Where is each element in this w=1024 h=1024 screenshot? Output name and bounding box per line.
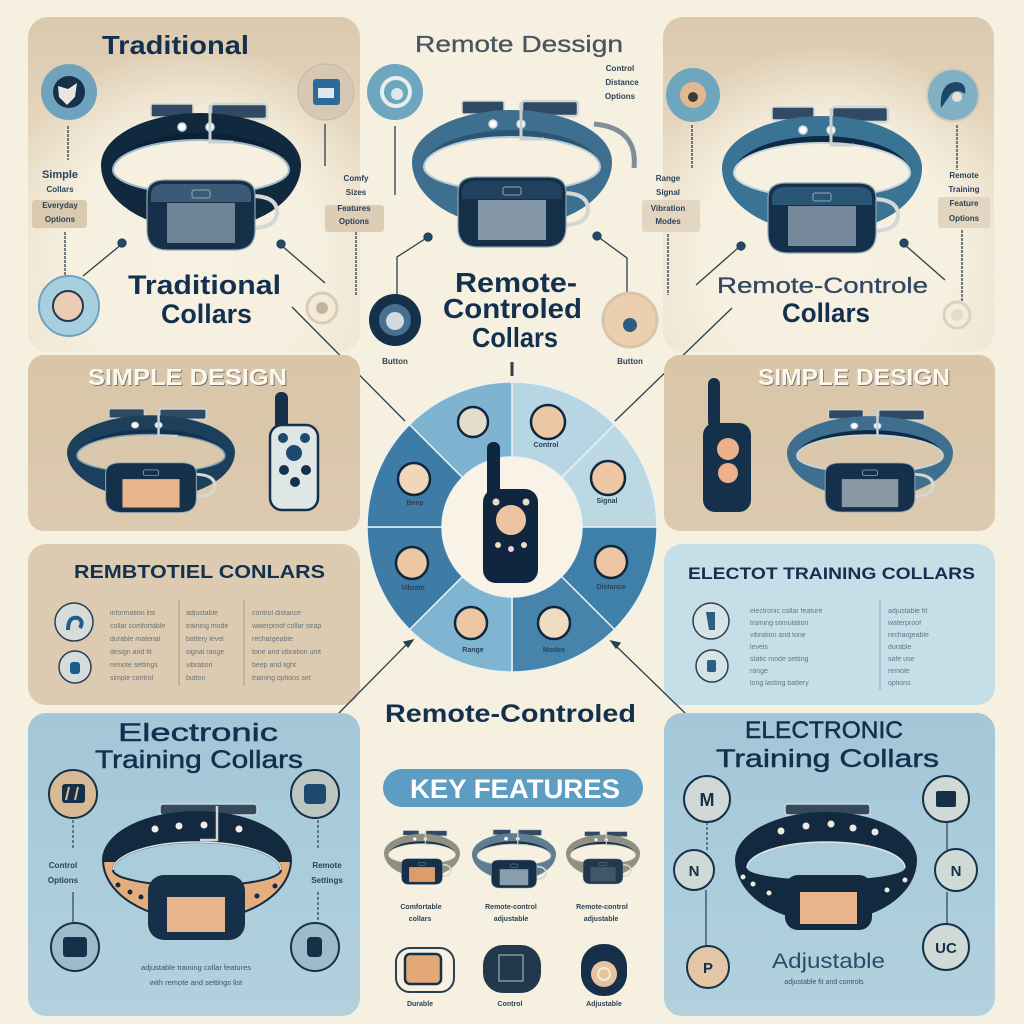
- icon: bottom right: [291, 923, 339, 971]
- icon: mid left: [674, 850, 714, 890]
- collar: navy electronic: [735, 804, 917, 930]
- icon: top left: [49, 770, 97, 818]
- segment labels: [401, 442, 626, 654]
- segment labels: Distance: [596, 584, 626, 591]
- segment labels: Vibrate: [401, 585, 425, 592]
- text: left callout: Modes: [655, 217, 681, 226]
- icon: bottom left: P: [703, 960, 713, 977]
- collar: feature 1: [384, 830, 460, 884]
- text: left callout: Options: [48, 876, 79, 885]
- text: feature labels row two: Durable: [407, 1001, 433, 1008]
- panel: electronic training collars right: [664, 713, 995, 1016]
- text: table rows: range: [750, 668, 768, 675]
- text: feature labels row one: Remote-control: [485, 904, 537, 911]
- heading: remote controlled collars: Remote-Controle: [717, 273, 928, 298]
- donut chart: remote buttons: [367, 382, 657, 672]
- text: table rows: static mode setting: [750, 656, 808, 663]
- icon: peach badge: Button: [617, 357, 643, 366]
- connector lines: [395, 126, 627, 376]
- collar: peach electronic: [103, 804, 291, 940]
- text: left callout: Signal: [656, 188, 680, 197]
- text: feature labels row two: [407, 1001, 622, 1008]
- text: table rows: options: [888, 680, 911, 687]
- text: table rows: battery level: [186, 636, 224, 643]
- text: common features callout: Sizes: [346, 188, 367, 197]
- collar: feature 2: [472, 830, 556, 888]
- icon: mid left: N: [689, 863, 699, 880]
- heading: remote controlled collars: Remote-: [455, 267, 577, 298]
- icon: top right badge: [298, 64, 354, 120]
- icon: feature 4: [396, 948, 454, 992]
- text: right callout: Remote: [949, 171, 979, 180]
- text: table rows: control distance: [252, 610, 301, 617]
- heading: [95, 719, 303, 774]
- segments: [367, 382, 657, 672]
- segment labels: Beep: [406, 500, 424, 507]
- text: remote note: Distance: [605, 78, 639, 87]
- panel: traditional collars: [28, 17, 405, 421]
- icon: remote badge: [367, 64, 423, 120]
- text: right callout: [311, 861, 343, 885]
- icon: bottom left: [51, 923, 99, 971]
- text: table rows: beep and light: [252, 662, 296, 669]
- text: table rows: rechargeable: [888, 632, 929, 639]
- text: table rows: levels: [750, 644, 768, 651]
- text: left callout: [48, 861, 79, 885]
- text: simple design callout: [32, 169, 87, 228]
- heading: Electronic: [118, 719, 278, 747]
- icon: lower left badge: [39, 276, 99, 336]
- icon: peach badge: [603, 293, 657, 366]
- text: right callout: [938, 171, 990, 228]
- panel: simple design left: [28, 355, 360, 531]
- text: right callout: Options: [949, 214, 980, 223]
- text: table rows: design and fit: [110, 649, 152, 656]
- connector lines: [73, 820, 318, 922]
- text: feature labels row one: [400, 904, 628, 923]
- text: left callout: Control: [49, 861, 77, 870]
- heading: remote controlled collars: [717, 273, 928, 328]
- icon: top left: M: [700, 790, 714, 810]
- icon: dark remote: [703, 378, 751, 512]
- heading: SIMPLE DESIGN: [759, 365, 951, 391]
- text: table rows: [750, 600, 929, 690]
- text: table rows: signal range: [186, 649, 224, 656]
- icon: bottom: [696, 650, 728, 682]
- text: table rows: waterproof: [887, 620, 921, 627]
- icon: bottom right: [923, 924, 969, 970]
- text: table rows: safe use: [888, 656, 915, 663]
- text: common features callout: Options: [339, 217, 370, 226]
- panel: remote collars table: [28, 544, 360, 705]
- heading: SIMPLE DESIGN: [89, 365, 288, 391]
- text: table rows: collar comfortable: [110, 623, 165, 630]
- icon: bottom left: [687, 946, 729, 988]
- connector lines: [615, 125, 962, 421]
- heading: traditional collars: [128, 270, 281, 329]
- feature grid: [384, 830, 640, 1008]
- collar: [67, 409, 235, 512]
- connector lines: [706, 822, 947, 946]
- collar: remote controlled: [412, 101, 612, 247]
- text: feature labels row one: adjustable: [494, 916, 528, 923]
- text: table rows: waterproof collar strap: [251, 623, 321, 630]
- text: feature labels row one: adjustable: [584, 916, 618, 923]
- heading: REMBTOTIEL CONLARS: [74, 562, 325, 582]
- text: table rows: remote: [888, 668, 910, 675]
- icon: lower right badge: [307, 293, 337, 323]
- text: common features callout: [325, 174, 384, 232]
- icon: feature 5: [483, 945, 541, 993]
- icon: top left: [684, 776, 730, 822]
- text: remote note: Control: [606, 64, 634, 73]
- panel: electronic training collars left: [28, 713, 360, 1016]
- text: common features callout: Features: [337, 204, 371, 213]
- text: feature labels row one: Comfortable: [400, 904, 442, 911]
- text: simple design callout: Simple: [42, 169, 78, 181]
- heading: remote controlled collars: Collars: [472, 322, 558, 353]
- text: left callout: Vibration: [651, 204, 685, 213]
- heading: remote design: Remote Dessign: [415, 31, 623, 57]
- text: right callout: Settings: [311, 876, 343, 885]
- heading: ELECTOT TRAINING COLLARS: [688, 564, 975, 583]
- text: caption: [141, 963, 251, 987]
- text: table rows: vibration: [186, 662, 213, 669]
- text: table rows: simple control: [110, 675, 154, 682]
- segment labels: Modes: [543, 647, 565, 654]
- icon: feature 6: [581, 944, 627, 996]
- collar: remote: [722, 107, 922, 253]
- heading: SIMPLE DESIGN: [88, 364, 287, 390]
- heading: remote controlled: Remote-Controled: [385, 700, 636, 728]
- text: left callout: [642, 174, 700, 232]
- key features pill: KEY FEATURES: [410, 774, 620, 804]
- text: table rows: vibration and tone: [750, 632, 806, 639]
- text: caption: adjustable training collar features: [141, 963, 251, 972]
- segment labels: Range: [462, 647, 484, 654]
- text: feature labels row two: Adjustable: [586, 1001, 622, 1008]
- key features pill: [383, 769, 643, 807]
- text: table rows: electronic collar feature: [750, 608, 822, 615]
- collar: traditional: [101, 104, 301, 250]
- text: remote note: [605, 64, 639, 101]
- collar: [787, 410, 953, 512]
- heading: traditional: Traditional: [102, 30, 249, 60]
- text: table rows: training mode: [186, 623, 229, 630]
- segment labels: Control: [534, 442, 558, 449]
- collar: feature 3: [566, 831, 640, 884]
- icon: bottom right: UC: [935, 940, 957, 957]
- text: table rows: button: [186, 675, 206, 682]
- text: simple design callout: Collars: [46, 185, 74, 194]
- icon: curve: [55, 603, 93, 641]
- text: table rows: durable material: [110, 636, 161, 643]
- text: caption: adjustable fit and controls: [784, 979, 864, 986]
- arrow: to lower right panel: [611, 641, 686, 714]
- icon: remote: [483, 442, 538, 583]
- panel: electronic training table: [664, 544, 995, 705]
- heading: ELECTRONIC: [745, 717, 903, 744]
- heading: remote controlled collars: [443, 267, 582, 353]
- panel: remote design: [367, 31, 657, 376]
- icon: faint badge: [944, 302, 970, 328]
- text: remote note: Options: [605, 92, 636, 101]
- text: feature labels row two: Control: [498, 1001, 522, 1008]
- icon: top right: [923, 776, 969, 822]
- text: table rows: training options set: [252, 675, 311, 682]
- text: table rows: rechargeable: [252, 636, 293, 643]
- heading: traditional collars: Traditional: [128, 270, 281, 300]
- text: right callout: Training: [948, 185, 980, 194]
- panel: remote-controlled collars top right: [615, 17, 994, 421]
- heading: SIMPLE DESIGN: [758, 364, 950, 390]
- text: table rows: information list: [110, 610, 155, 617]
- heading: [716, 717, 939, 773]
- text: feature labels row one: collars: [409, 916, 431, 923]
- icon: white remote: [270, 392, 318, 510]
- icon: lock: [59, 651, 91, 683]
- text: table rows: adjustable fit: [888, 608, 927, 615]
- arrow: to lower left panel: [338, 640, 413, 714]
- connector lines: [65, 124, 405, 421]
- text: table rows: long lasting battery: [750, 680, 809, 687]
- icon: top right badge: [927, 69, 979, 121]
- icon: dark camera badge: Button: [382, 357, 408, 366]
- panel: simple design right: [664, 355, 995, 531]
- text: table rows: [110, 600, 321, 686]
- text: table rows: adjustable: [186, 610, 218, 617]
- text: table rows: durable: [888, 644, 911, 651]
- heading: Training Collars: [95, 746, 303, 774]
- text: table rows: tone and vibration unit: [252, 649, 321, 656]
- text: table rows: training stimulation: [750, 620, 808, 627]
- heading: remote controlled collars: Collars: [782, 298, 870, 328]
- text: left callout: Range: [656, 174, 681, 183]
- icon: top: [693, 603, 729, 639]
- icon: mid right: N: [951, 863, 961, 880]
- text: right callout: Remote: [312, 861, 342, 870]
- knobs: [396, 405, 627, 639]
- text: adjustable: Adjustable: [772, 950, 885, 973]
- ring detail: [594, 124, 634, 168]
- text: feature labels row one: Remote-control: [576, 904, 628, 911]
- icon: dark camera badge: [369, 294, 421, 366]
- text: table rows: remote settings: [110, 662, 158, 669]
- icon: top right: [291, 770, 339, 818]
- text: right callout: Feature: [950, 199, 979, 208]
- text: simple design callout: Everyday: [42, 201, 78, 210]
- text: common features callout: Comfy: [344, 174, 369, 183]
- text: simple design callout: Options: [45, 215, 76, 224]
- heading: traditional collars: Collars: [161, 299, 252, 329]
- heading: remote controlled collars: Controled: [443, 293, 582, 324]
- text: caption: with remote and settings list: [149, 978, 243, 987]
- icon: top left badge: [41, 64, 97, 120]
- center hub: [442, 457, 582, 597]
- icon: top left badge: [666, 68, 720, 122]
- icon: mid right: [935, 849, 977, 891]
- heading: Training Collars: [716, 745, 939, 773]
- segment labels: Signal: [596, 498, 618, 505]
